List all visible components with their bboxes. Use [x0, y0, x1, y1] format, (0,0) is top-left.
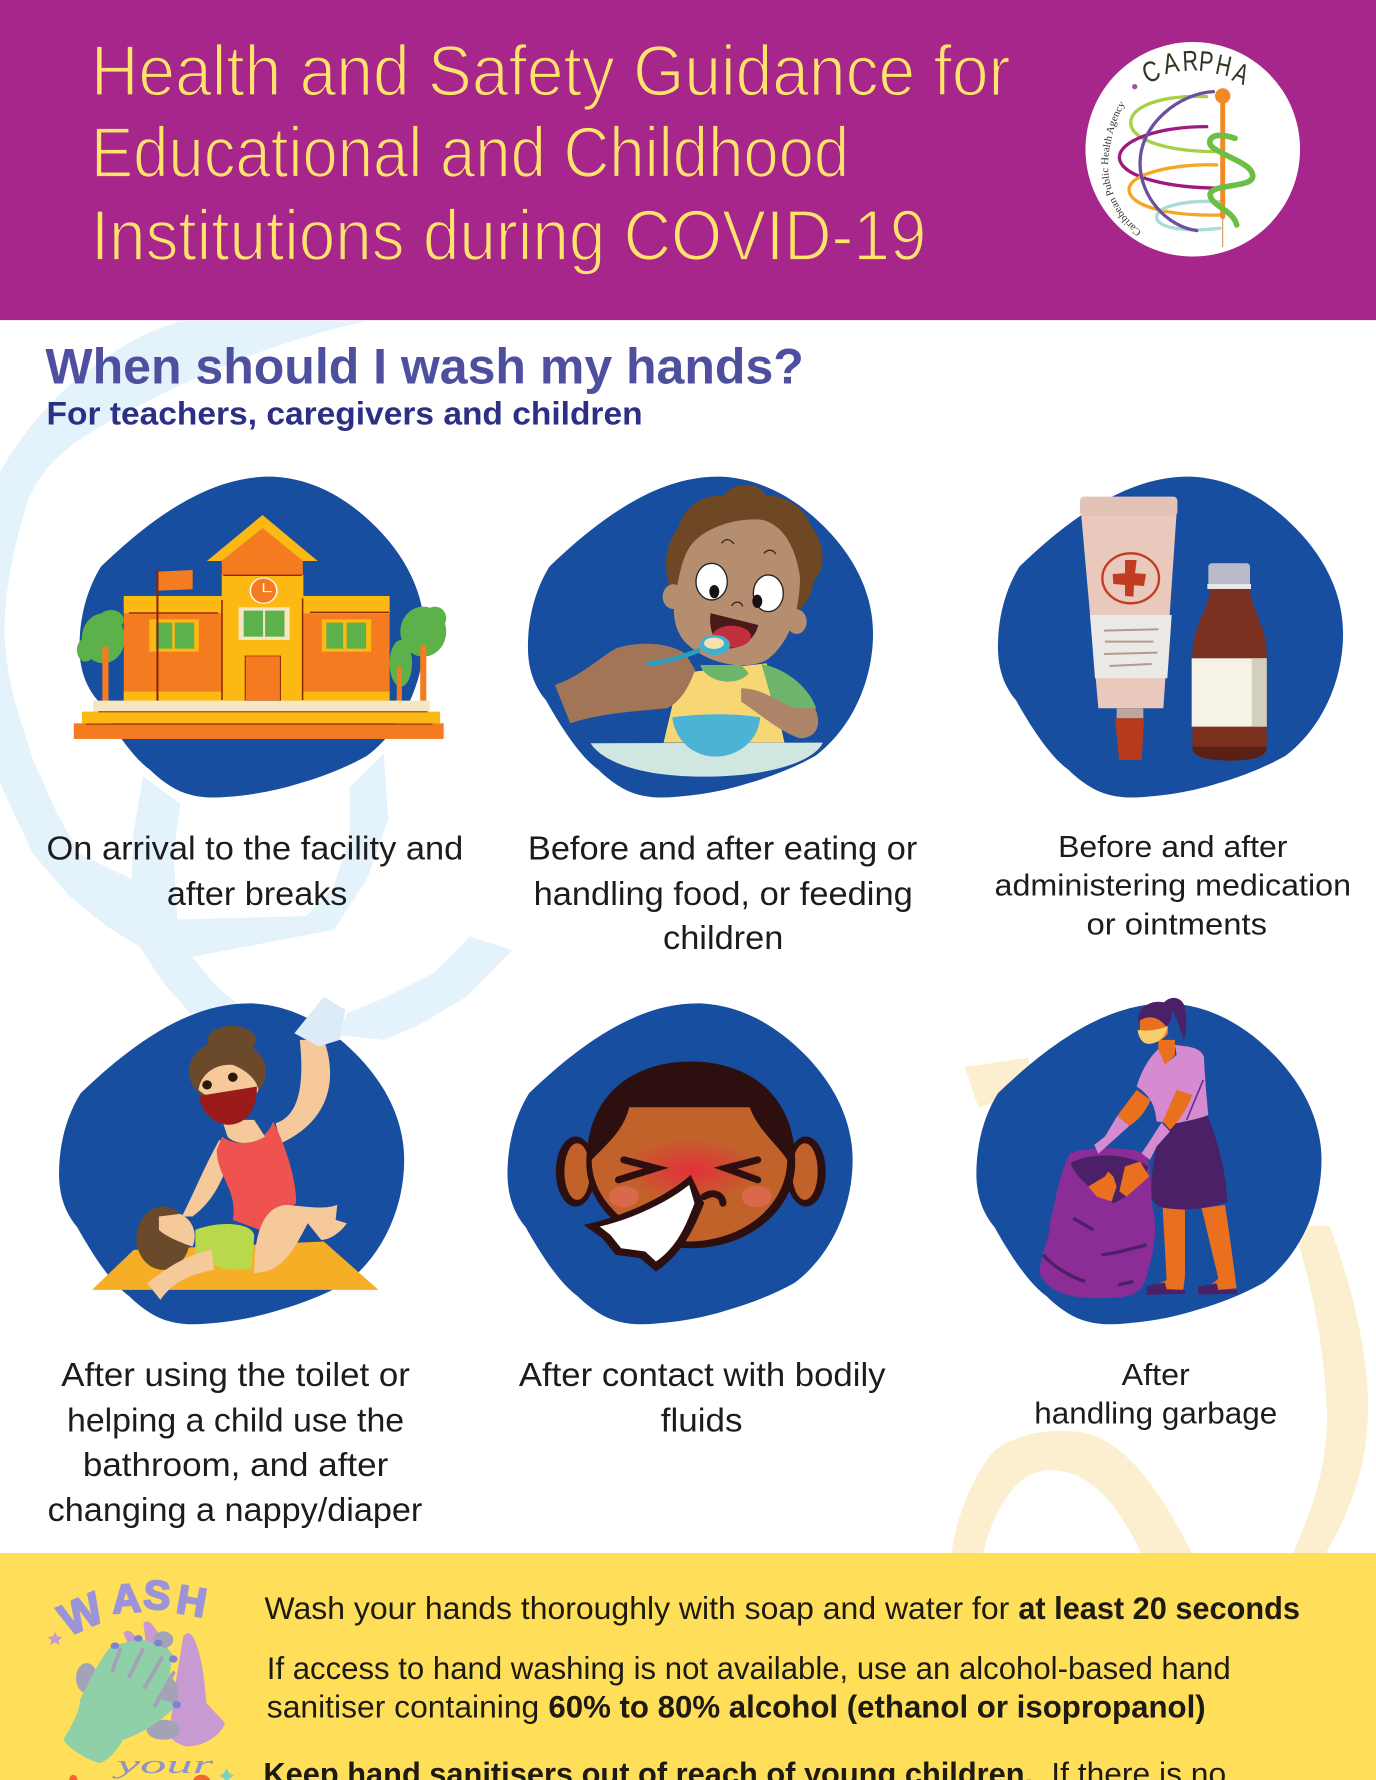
caption: or ointments [1086, 908, 1267, 941]
title: Educational and Childhood [91, 113, 849, 193]
lettering: WASH: A [110, 1574, 143, 1622]
logo name [1138, 45, 1253, 92]
panel: medication [995, 477, 1351, 941]
title [91, 31, 1010, 276]
icon: ointment tube and bottle [1080, 497, 1267, 761]
blob [507, 1003, 853, 1324]
caption: children [663, 919, 783, 956]
text: sanitiser: 60% to 80% alcohol (ethanol or isopropanol) [548, 1690, 1206, 1725]
background swirl: light blue [0, 321, 512, 1040]
panel: wash advice [0, 1553, 1376, 1780]
panel: garbage [976, 998, 1322, 1431]
logo name: A [1160, 47, 1182, 81]
subheading: For teachers, caregivers and children [47, 396, 643, 432]
background swirl: cream [951, 1058, 1368, 1553]
caption: After [1122, 1359, 1190, 1392]
logo name: P [1198, 46, 1215, 79]
lettering: your: your [111, 1750, 215, 1779]
icon: child being fed [555, 485, 823, 777]
blob [976, 1003, 1322, 1324]
logo: CARPHA [1085, 42, 1300, 256]
text: wash: Wash your hands thoroughly with soap and water for [265, 1591, 1009, 1626]
panel: bodily fluids [507, 1003, 886, 1438]
lettering: WASH: S [142, 1571, 172, 1619]
caption: after breaks [167, 875, 347, 912]
text: sanitiser [267, 1651, 1231, 1725]
icon: woman with garbage bag [1040, 998, 1237, 1298]
icon: wash your hands [48, 1571, 234, 1780]
logo name: R [1182, 45, 1199, 78]
caption: handling food, or feeding [534, 875, 913, 912]
icon: school [74, 515, 446, 739]
title: Health and Safety Guidance for [91, 31, 1010, 111]
panel: toilet and nappy [48, 997, 422, 1528]
logo name: H [1213, 49, 1234, 83]
caption: fluids [661, 1401, 742, 1438]
caption: bathroom, and after [83, 1446, 388, 1483]
text: wash: at least 20 seconds [1018, 1591, 1300, 1626]
blob [998, 477, 1343, 798]
logo name: C [1138, 55, 1165, 90]
caption: After contact with bodily [519, 1356, 886, 1393]
panel: eating [528, 477, 917, 956]
caption [47, 829, 463, 912]
caption: administering medication [995, 870, 1351, 903]
icon: mother changing baby [92, 997, 378, 1300]
caption [995, 831, 1351, 941]
logo name: A [1228, 57, 1253, 92]
caption [1034, 1359, 1277, 1431]
panel: on arrival [47, 477, 463, 912]
heading: When should I wash my hands? [45, 339, 804, 395]
caption: Before and after eating or [528, 829, 917, 866]
icon: star [48, 1632, 62, 1645]
text: sanitiser: sanitiser containing [267, 1690, 539, 1725]
caption: On arrival to the facility and [47, 829, 463, 866]
lettering: WASH: H [173, 1576, 210, 1626]
caption: Before and after [1058, 831, 1287, 864]
caption: changing a nappy/diaper [48, 1491, 422, 1528]
caption: handling garbage [1034, 1398, 1277, 1431]
caption: helping a child use the [67, 1401, 404, 1438]
orange lettering tops [69, 1775, 210, 1780]
lettering: WASH: W [51, 1582, 111, 1646]
lettering: WASH [51, 1571, 210, 1646]
caption [519, 1356, 886, 1438]
blob [528, 477, 873, 798]
text: sanitiser: If access to hand washing is not available, use an alcohol-based hand [267, 1651, 1231, 1686]
logo agency text: Caribbean Public Health Agency [1101, 101, 1140, 236]
header banner [0, 0, 1376, 320]
logo emblem [1119, 84, 1253, 247]
caption: After using the toilet or [61, 1356, 410, 1393]
title: Institutions during COVID-19 [91, 196, 926, 276]
caption [528, 829, 917, 956]
caption [48, 1356, 422, 1528]
blob [59, 1003, 404, 1324]
icon: sneezing face [556, 1062, 826, 1272]
icon: sparkle [219, 1768, 234, 1780]
blob [79, 477, 425, 798]
